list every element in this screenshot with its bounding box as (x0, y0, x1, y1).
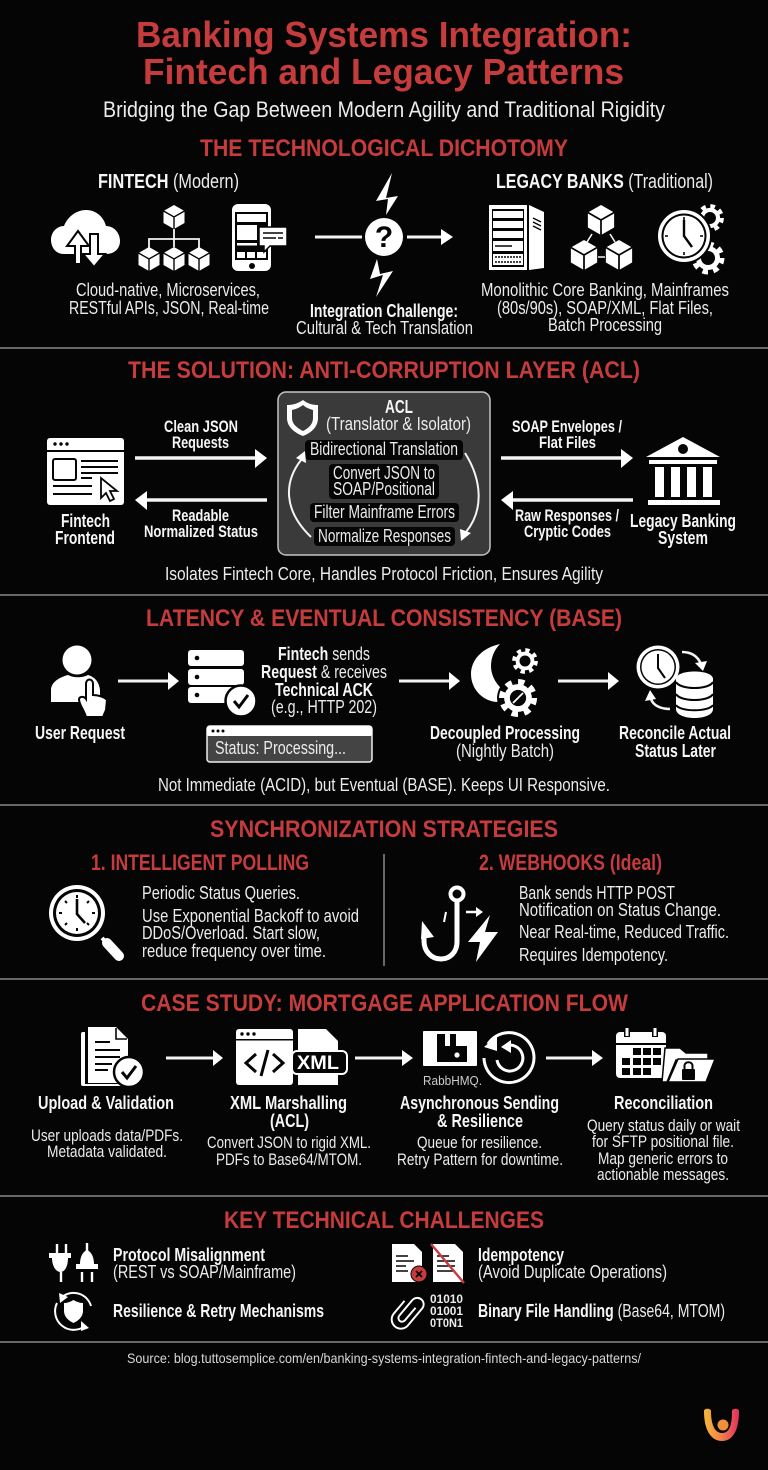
integration challenge label (296, 301, 473, 338)
arrow: normalized status: Normalized Status (144, 522, 258, 541)
arrow: normalized status: Readable (172, 506, 229, 525)
integration challenge label: Cultural & Tech Translation (296, 318, 473, 338)
strategy 2 heading: 2. WEBHOOKS (Ideal) (479, 850, 662, 875)
arrow (546, 1050, 603, 1066)
icon: paperclip and binary: 0T0N1 (430, 1316, 463, 1330)
icon: cloud with arrows (51, 210, 120, 267)
reconcile label (619, 723, 731, 761)
panel: case study (31, 990, 740, 1184)
fintech description (69, 280, 269, 318)
legacy system label (630, 511, 736, 548)
decoupled processing label: Decoupled Processing (430, 723, 580, 743)
arrow: raw responses (501, 491, 633, 541)
icon: paperclip and binary: 01001 (430, 1304, 463, 1318)
icon: document with check (81, 1027, 144, 1087)
panel: acl translator (278, 392, 490, 555)
arrow (355, 1050, 413, 1066)
title line 2: Fintech and Legacy Patterns (143, 51, 624, 92)
panel: technological dichotomy (51, 135, 729, 338)
icon: moon and gears (471, 644, 539, 719)
webhook text (519, 883, 729, 965)
status window: Status: Processing... (215, 738, 346, 758)
arrow: raw responses: Cryptic Codes (524, 522, 611, 541)
heading: LATENCY & EVENTUAL CONSISTENCY (BASE) (146, 605, 622, 632)
step 2 text: Convert JSON to rigid XML. (207, 1133, 371, 1152)
technical ack text: Technical ACK (275, 680, 373, 700)
step 1 text: Upload & Validation (38, 1093, 174, 1113)
technical ack text (261, 644, 387, 717)
step: convert json: SOAP/Positional (333, 479, 435, 499)
step 4 text: Reconciliation (614, 1093, 713, 1113)
webhook text: Requires Idempotency. (519, 945, 668, 965)
strategy 1 heading: 1. INTELLIGENT POLLING (91, 850, 309, 875)
step: filter errors: Filter Mainframe Errors (314, 502, 455, 522)
step 3 text: Asynchronous Sending (400, 1093, 559, 1113)
step 2 text: PDFs to Base64/MTOM. (216, 1150, 362, 1169)
integration challenge label: Integration Challenge: (310, 301, 458, 321)
icon: clock with gears (657, 206, 722, 272)
polling text: Periodic Status Queries. (142, 883, 300, 903)
icon: xml marshalling (236, 1029, 347, 1085)
cycle arrows (289, 451, 479, 541)
legacy description (481, 280, 729, 335)
fintech frontend label: Fintech (61, 511, 110, 531)
step 4 text: actionable messages. (597, 1165, 729, 1184)
heading: KEY TECHNICAL CHALLENGES (224, 1207, 544, 1234)
heading: THE TECHNOLOGICAL DICHOTOMY (200, 135, 568, 162)
logo (704, 1409, 739, 1441)
icon: mainframe server (489, 205, 544, 270)
polling text: reduce frequency over time. (142, 941, 326, 961)
heading: CASE STUDY: MORTGAGE APPLICATION FLOW (141, 990, 628, 1017)
title block (103, 14, 665, 122)
subtitle: Bridging the Gap Between Modern Agility and Traditional Rigidity (103, 97, 665, 122)
icon: monolith cubes (571, 205, 632, 270)
step 3 text (397, 1093, 563, 1169)
arrow: clean json requests: Requests (172, 433, 229, 452)
step 4 text: Map generic errors to (598, 1149, 728, 1168)
polling text: DDoS/Overload. Start slow, (142, 923, 320, 943)
technical ack text: Fintech sends (278, 644, 370, 664)
icon: rabbitmq queue and retry (423, 1031, 534, 1088)
decoupled processing label (430, 723, 580, 761)
arrow: clean json requests: Clean JSON (164, 417, 238, 436)
protocol misalignment text (113, 1245, 296, 1282)
arrow: soap envelopes: Flat Files (539, 433, 596, 452)
icon: bank building (646, 437, 720, 505)
step: convert json (329, 463, 439, 499)
polling text (142, 883, 359, 961)
arrow (166, 1050, 223, 1066)
panel: synchronization strategies (49, 816, 729, 966)
protocol misalignment text: Protocol Misalignment (113, 1245, 265, 1265)
step 3 text: Retry Pattern for downtime. (397, 1150, 563, 1169)
icon: fintech frontend window (47, 438, 124, 505)
legacy system label: Legacy Banking (630, 511, 736, 531)
step 2 text (207, 1093, 371, 1169)
idempotency text (478, 1245, 667, 1282)
panel: latency and eventual consistency (35, 605, 731, 795)
legacy heading: LEGACY BANKS (Traditional) (496, 171, 713, 193)
panel: key technical challenges (49, 1207, 725, 1332)
step: convert json: Convert JSON to (333, 463, 435, 483)
reconcile label: Status Later (635, 741, 716, 761)
arrow: soap envelopes (501, 417, 633, 468)
fintech heading: FINTECH (Modern) (98, 171, 239, 193)
arrow: raw responses: Raw Responses / (515, 506, 619, 525)
protocol misalignment text: (REST vs SOAP/Mainframe) (113, 1262, 296, 1282)
arrow (118, 672, 179, 690)
idempotency text: (Avoid Duplicate Operations) (478, 1262, 667, 1282)
step: bidirectional translation: Bidirectional Translation (310, 439, 458, 459)
technical ack text: (e.g., HTTP 202) (271, 697, 377, 717)
status window (207, 726, 372, 762)
heading: THE SOLUTION: ANTI-CORRUPTION LAYER (ACL) (128, 357, 640, 384)
icon: duplicate documents (392, 1244, 464, 1283)
webhook text: Notification on Status Change. (519, 900, 721, 920)
icon: rabbitmq queue and retry: RabbHMQ. (423, 1073, 482, 1088)
step 2 text: XML Marshalling (230, 1093, 347, 1113)
icon: phone with chat bubble (232, 204, 287, 271)
step 3 text: Queue for resilience. (417, 1133, 542, 1152)
acl heading: (Translator & Isolator) (326, 414, 471, 434)
arrow (558, 672, 619, 690)
panel: anti-corruption layer (47, 357, 736, 584)
legacy system label: System (658, 528, 708, 548)
legacy description: Batch Processing (548, 315, 662, 335)
acl heading: ACL (385, 397, 413, 417)
step 4 text (587, 1093, 740, 1184)
fintech description: RESTful APIs, JSON, Real-time (69, 298, 269, 318)
icon: server with check (188, 650, 256, 716)
latency summary: Not Immediate (ACID), but Eventual (BASE). Keeps UI Responsive. (158, 775, 610, 795)
fintech frontend label: Frontend (55, 528, 115, 548)
polling text: Use Exponential Backoff to avoid (142, 906, 359, 926)
icon: microservices hierarchy (138, 205, 210, 271)
user request label: User Request (35, 723, 125, 743)
step: normalize responses: Normalize Responses (318, 526, 451, 546)
step 3 text: & Resilience (437, 1111, 523, 1131)
icon: shield (287, 400, 318, 436)
arrow: normalized status (135, 491, 267, 541)
arrow (399, 672, 460, 690)
icon: paperclip and binary (388, 1292, 463, 1332)
icon: paperclip and binary: 01010 (430, 1292, 463, 1306)
arrow: clean json requests (135, 417, 267, 468)
arrow: soap envelopes: SOAP Envelopes / (512, 417, 622, 436)
icon: xml marshalling: XML (297, 1053, 339, 1074)
decoupled processing label: (Nightly Batch) (456, 741, 554, 761)
heading: SYNCHRONIZATION STRATEGIES (210, 816, 558, 843)
acl summary: Isolates Fintech Core, Handles Protocol Friction, Ensures Agility (165, 564, 603, 584)
fintech description: Cloud-native, Microservices, (76, 280, 260, 300)
icon: clock and database (636, 646, 713, 718)
reconcile label: Reconcile Actual (619, 723, 731, 743)
icon: integration clash with arrow (315, 173, 453, 297)
webhook text: Bank sends HTTP POST (519, 883, 675, 903)
icon: calendar and locked folder (616, 1027, 715, 1082)
technical ack text: Request & receives (261, 662, 387, 682)
icon: user request (51, 646, 107, 717)
icon: webhook hook (421, 888, 498, 962)
resilience text: Resilience & Retry Mechanisms (113, 1301, 324, 1321)
icon: mismatched plugs (49, 1243, 98, 1282)
idempotency text: Idempotency (478, 1245, 564, 1265)
binary handling text: Binary File Handling (Base64, MTOM) (478, 1301, 725, 1321)
title line 1: Banking Systems Integration: (136, 14, 632, 55)
step 2 text: (ACL) (270, 1111, 309, 1131)
icon: integration clash with arrow: ? (375, 221, 393, 254)
acl heading (326, 397, 471, 434)
step 1 text: User uploads data/PDFs. (31, 1126, 183, 1145)
step 1 text: Metadata validated. (47, 1142, 167, 1161)
fintech frontend label (55, 511, 115, 548)
source line: Source: blog.tuttosemplice.com/en/banking-systems-integration-fintech-and-legacy-patterns/ (127, 1350, 641, 1366)
step 1 text (31, 1093, 183, 1161)
step 4 text: for SFTP positional file. (592, 1132, 734, 1151)
legacy description: (80s/90s), SOAP/XML, Flat Files, (497, 298, 713, 318)
icon: shield with retry (55, 1293, 91, 1331)
icon: magnifier clock (49, 885, 119, 956)
